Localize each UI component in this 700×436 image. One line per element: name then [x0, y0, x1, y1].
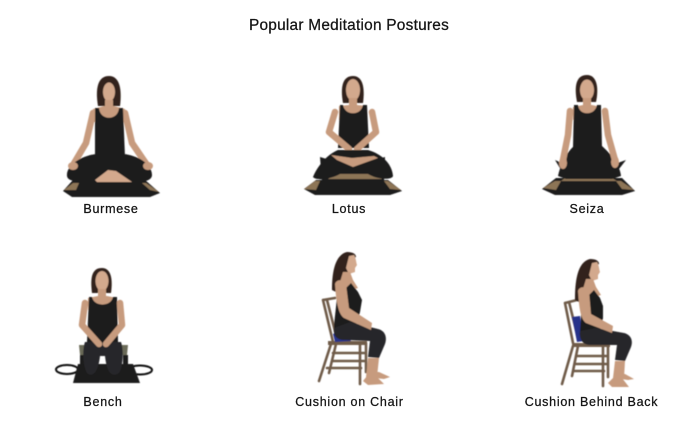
label: Lotus: Lotus [332, 202, 366, 216]
label: Cushion Behind Back: Cushion Behind Back [525, 395, 658, 409]
panel: Cushion on Chair [295, 252, 404, 409]
label: Bench: Bench [83, 395, 123, 409]
illustration: Bench posture [56, 268, 152, 383]
title: Popular Meditation Postures [249, 17, 449, 34]
illustration: Cushion Behind Back posture [562, 259, 634, 387]
label: Burmese: Burmese [83, 202, 139, 216]
illustration: Lotus posture [304, 76, 402, 195]
panel: Seiza [542, 75, 635, 216]
label: Cushion on Chair: Cushion on Chair [295, 395, 404, 409]
illustration: Burmese posture [63, 76, 160, 197]
panel: Cushion Behind Back [525, 259, 658, 409]
panel: Lotus [304, 76, 402, 216]
illustration: Cushion on Chair posture [319, 252, 390, 385]
label: Seiza: Seiza [570, 202, 604, 216]
panel: Bench [56, 268, 152, 409]
panel: Burmese [63, 76, 160, 216]
illustration: Seiza posture [542, 75, 635, 195]
